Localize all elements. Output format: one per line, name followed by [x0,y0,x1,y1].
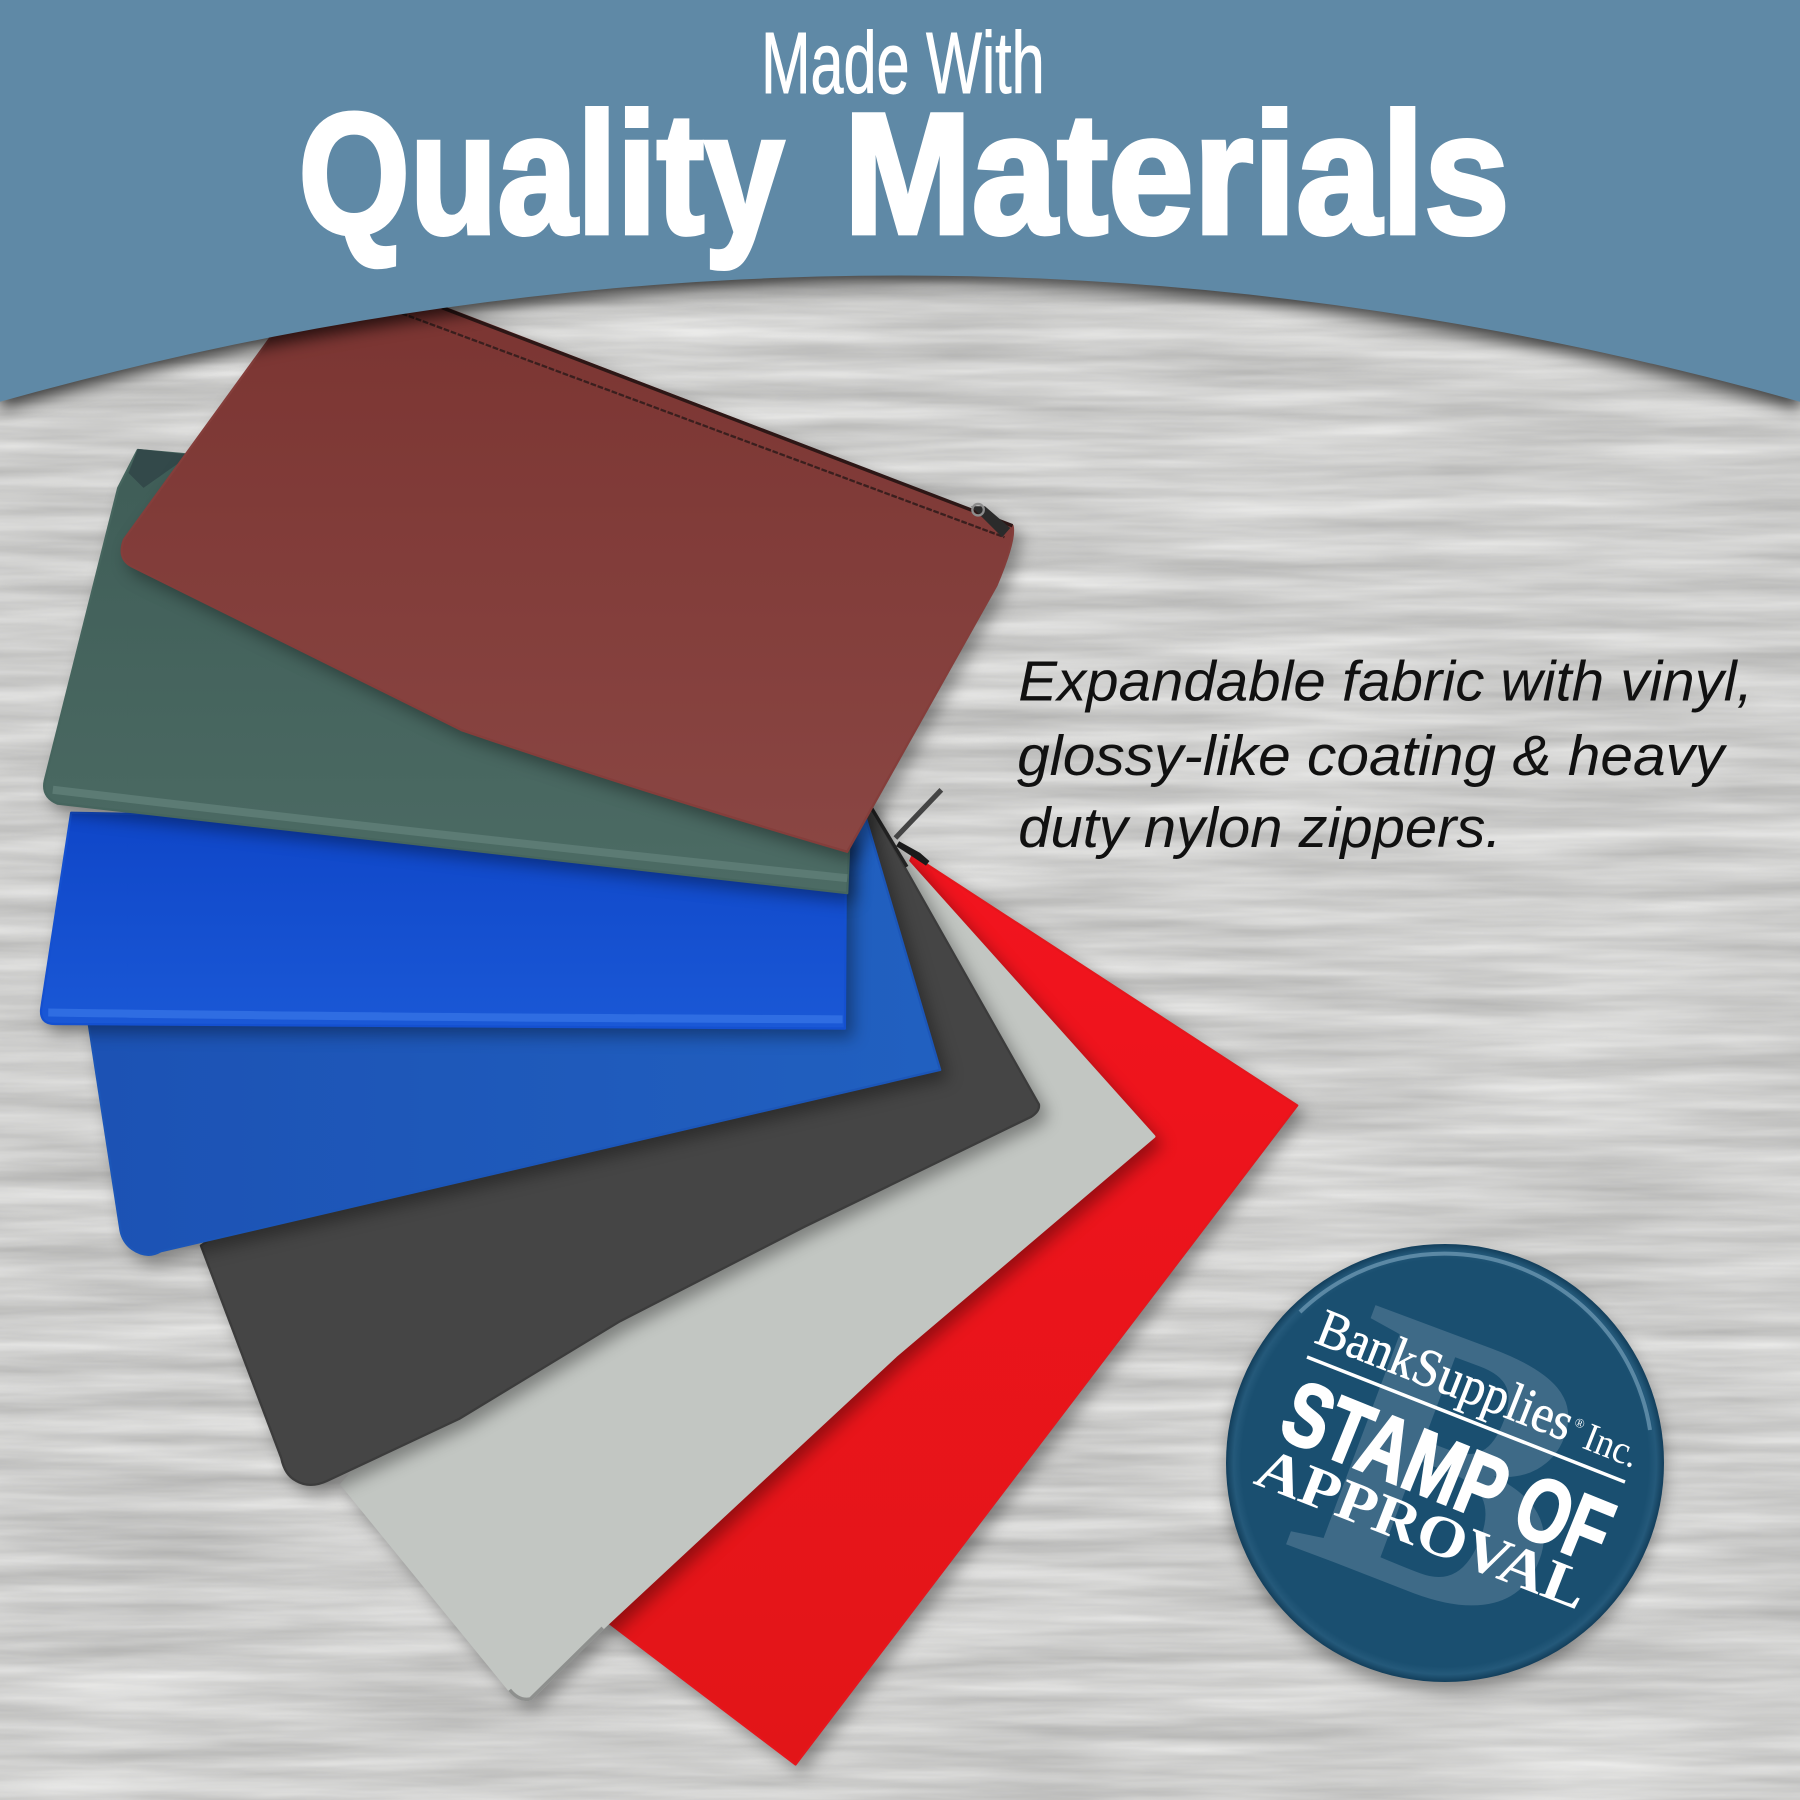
title line 1: Made With [761,15,1045,112]
title word: Quality: Quality [298,78,784,270]
title [298,15,1510,270]
bag: silver [342,861,1154,1699]
title word: Materials: Materials [844,78,1510,270]
approval: APPROVAL [1247,1435,1597,1622]
bag: charcoal [201,800,1039,1485]
stamp of approval badge [1226,1217,1664,1713]
brand name: BankSupplies [1309,1297,1583,1452]
description text [1017,649,1753,859]
zipper pull [867,790,941,867]
description line 1: Expandable fabric with vinyl, [1018,649,1753,712]
description line 2: glossy-like coating & heavy [1017,724,1727,787]
bag: maroon [122,305,1013,852]
brand name: ® [1572,1414,1587,1432]
fan of zipper bags [41,305,1297,1764]
bag: medium blue [88,809,940,1255]
bag: green [44,449,849,893]
badge highlight [1300,1254,1650,1430]
divider line [1307,1357,1625,1482]
badge disc [1226,1244,1664,1682]
brand name: Inc. [1578,1414,1646,1476]
banner [0,0,1800,402]
stamp of: STAMP OF [1269,1362,1626,1584]
description line 3: duty nylon zippers. [1018,796,1502,859]
bag: red [600,855,1297,1764]
zipper slider [971,506,1010,537]
watermark B: B [1250,1217,1645,1713]
bag: bright blue [41,813,846,1029]
